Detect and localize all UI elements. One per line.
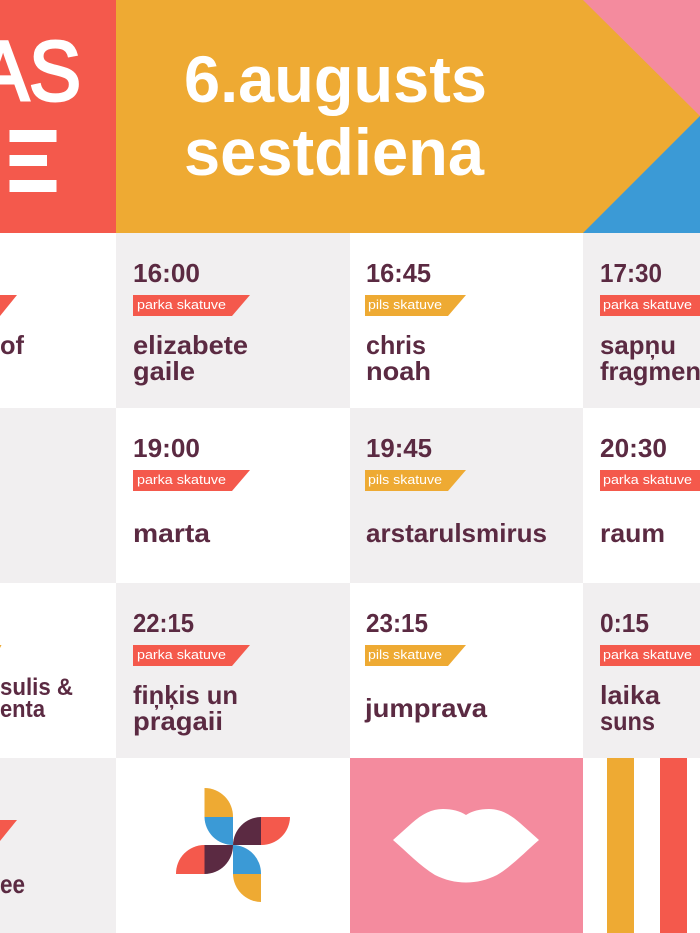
cell: raum: raum <box>600 518 665 548</box>
cell: sapņu fragmen: parka skatuve <box>603 298 692 312</box>
cell: chris noah: 16:45 <box>366 258 431 288</box>
cell: sapņu fragmen <box>600 258 700 386</box>
cell: elizabete gaile: 16:00 <box>133 258 200 288</box>
cell: raum: 20:30 <box>600 433 667 463</box>
cell: elizabete gaile: gaile <box>133 356 195 386</box>
cell: marta: 19:00 <box>133 433 200 463</box>
cell: laika suns: parka skatuve <box>603 648 692 662</box>
icon: pinwheel <box>176 788 290 902</box>
cell: sapņu fragmen: fragmen <box>600 356 700 386</box>
cell: sulis & enta: sulis & <box>0 674 73 701</box>
cell: jumprava <box>364 608 488 723</box>
cell: arstarulsmirus: pils skatuve <box>368 473 442 487</box>
cell: of: of <box>0 330 24 360</box>
cell: elizabete gaile: parka skatuve <box>137 298 226 312</box>
panel: header: sestdiena <box>184 115 485 189</box>
cell: sapņu fragmen: 17:30 <box>600 258 662 288</box>
cell: ee <box>0 820 25 899</box>
cell: fiņķis un pragaii: parka skatuve <box>137 648 226 662</box>
cell: sapņu fragmen: sapņu <box>600 330 676 360</box>
cell: arstarulsmirus <box>365 433 547 548</box>
cell: chris noah <box>365 258 466 386</box>
cell: marta: parka skatuve <box>137 473 226 487</box>
cell: fiņķis un pragaii: fiņķis un <box>133 680 238 710</box>
cell: fiņķis un pragaii <box>133 608 250 736</box>
cell: of <box>0 295 24 360</box>
cell: elizabete gaile: elizabete <box>133 330 248 360</box>
panel: schedule backgrounds <box>0 233 700 933</box>
panel: header <box>0 0 700 233</box>
cell: jumprava: 23:15 <box>366 608 428 638</box>
cell: laika suns <box>600 608 700 736</box>
panel: lips <box>350 758 583 933</box>
cell: fiņķis un pragaii: pragaii <box>133 706 223 736</box>
panel: stripes <box>583 758 700 933</box>
cell: chris noah: noah <box>366 356 431 386</box>
cell: elizabete gaile <box>133 258 250 386</box>
cell: marta <box>133 433 250 548</box>
cell: chris noah: chris <box>366 330 426 360</box>
cell: raum <box>600 433 700 548</box>
panel: header: 6.augusts <box>184 42 487 116</box>
cell: sulis & enta: enta <box>0 696 46 723</box>
cell: laika suns: laika <box>600 680 661 710</box>
cell: jumprava: pils skatuve <box>368 648 442 662</box>
cell: ee: ee <box>0 869 25 899</box>
cell: arstarulsmirus: arstarulsmirus <box>366 518 547 548</box>
cell: marta: marta <box>133 518 211 548</box>
cell: jumprava: jumprava <box>364 693 488 723</box>
cell: arstarulsmirus: 19:45 <box>366 433 432 463</box>
cell: fiņķis un pragaii: 22:15 <box>133 608 194 638</box>
cell: laika suns: suns <box>600 706 655 736</box>
cell: laika suns: 0:15 <box>600 608 649 638</box>
cell: sulis & enta <box>0 645 73 723</box>
cell: raum: parka skatuve <box>603 473 692 487</box>
cell: chris noah: pils skatuve <box>368 298 442 312</box>
